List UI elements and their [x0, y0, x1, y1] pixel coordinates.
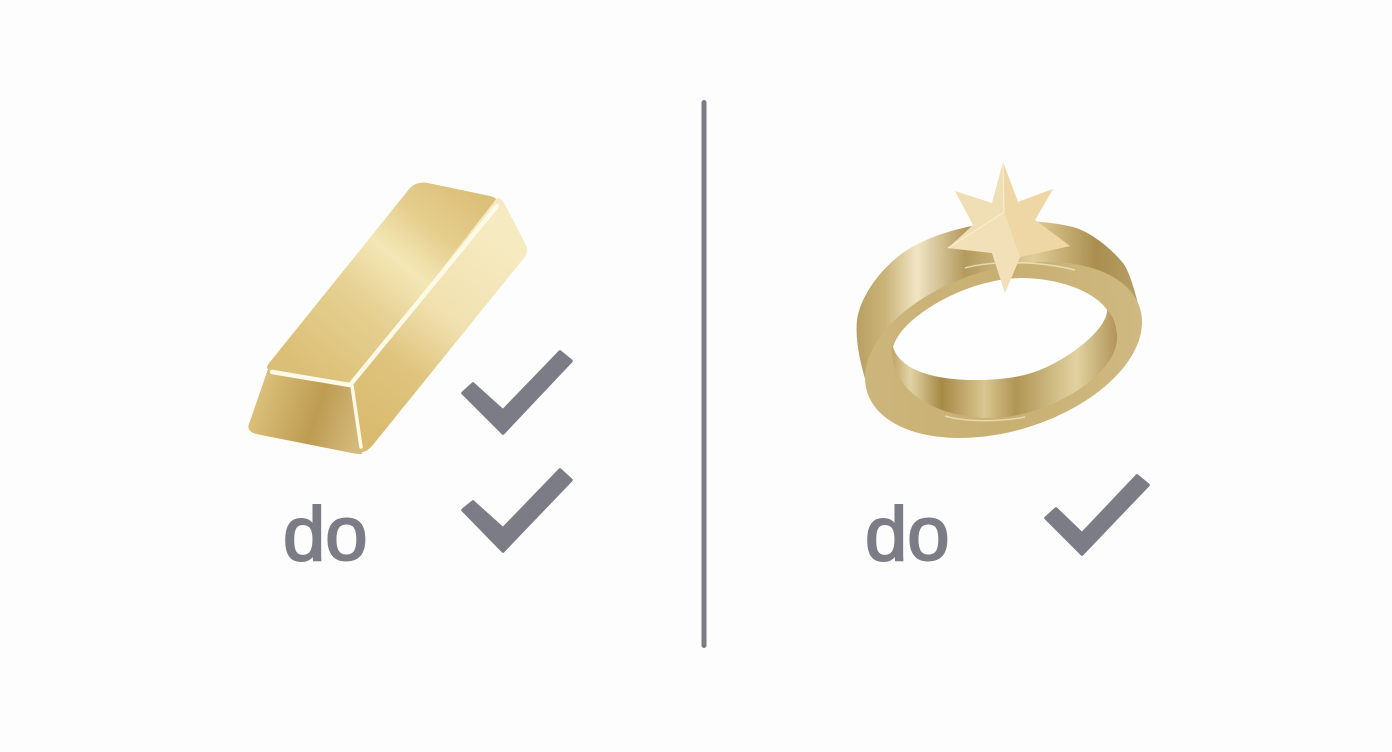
bar top face	[267, 183, 497, 383]
divider line	[702, 100, 706, 648]
icon: check mark lower left	[463, 470, 571, 551]
icon: gold ring	[843, 162, 1164, 469]
icon: check mark upper left	[463, 352, 571, 433]
ring front face	[843, 231, 1164, 469]
label: do right: do	[865, 492, 950, 577]
ring outer band	[857, 221, 1142, 382]
icon: gold bar	[248, 183, 527, 454]
label: do left: do	[283, 492, 368, 577]
ring star	[948, 162, 1070, 293]
ring inner wall	[892, 278, 1117, 418]
ring top rim highlight	[965, 263, 1075, 270]
bar front face	[248, 369, 362, 454]
ring opening	[893, 278, 1107, 380]
bar side face	[352, 198, 527, 452]
ring bottom rim highlight	[945, 416, 1025, 421]
bar edge highlights	[272, 206, 497, 447]
icon: check mark right	[1046, 476, 1148, 554]
